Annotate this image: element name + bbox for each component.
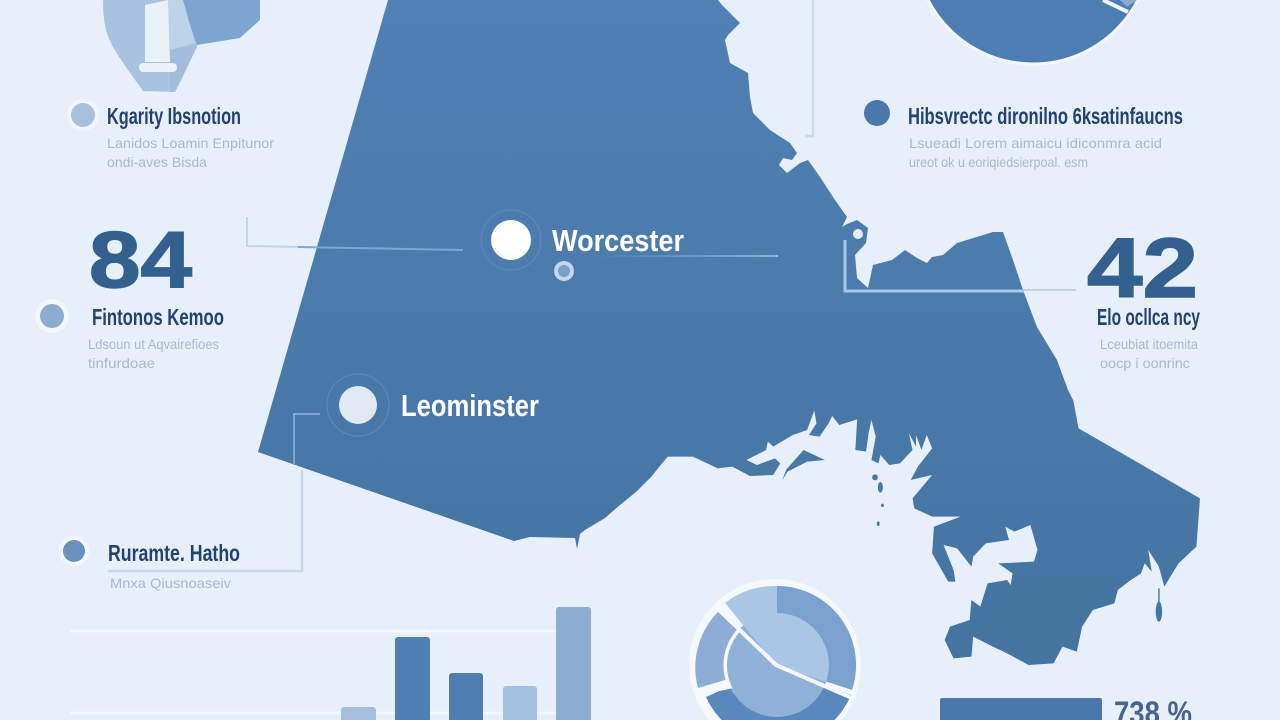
monument illustration (103, 0, 260, 92)
stat: 42: oocp i oonrinc (1100, 355, 1190, 371)
marker: Leominster (327, 374, 539, 436)
callout: top left (67, 99, 274, 170)
small marker (554, 261, 574, 281)
callout: top right: Hibsvrectc dironilno 6ksatinfaucns (908, 103, 1183, 129)
stat: 84: 84 (89, 215, 193, 304)
callout: top left: ondi-aves Bisda (107, 154, 207, 170)
callout: top left: Kgarity Ibsnotion (107, 103, 241, 129)
marker: Leominster: Leominster (401, 388, 539, 423)
bar chart (70, 607, 591, 720)
stat: 84 (35, 215, 224, 371)
progress bar (940, 695, 1192, 720)
donut chart (689, 579, 861, 720)
map silhouette (258, 0, 1200, 665)
stat: 42 (1087, 221, 1200, 371)
stat: 42: Lceubiat itoemita (1100, 336, 1198, 352)
callout: top right: Lsueadi Lorem aimaicu idiconmra acid (909, 135, 1162, 151)
callout: bottom left: Mnxa Qiusnoaseiv (110, 575, 231, 591)
callout: top right: ureot ok u eoriqiedsierpoal. esm (909, 154, 1088, 170)
callout: top right (864, 100, 1183, 170)
stat: 42: 42 (1087, 221, 1198, 315)
marker: Worcester: Worcester (552, 223, 684, 258)
stat: 84: Ldsoun ut Aqvairefioes (88, 336, 219, 352)
callout: top left: Lanidos Loamin Enpitunor (107, 135, 274, 151)
marker: Worcester (481, 210, 684, 270)
connector lines (108, 0, 1076, 571)
callout: bottom left (59, 536, 240, 591)
stat: 84: Fintonos Kemoo (92, 304, 224, 330)
stat: 42: Elo ocllca ncy (1097, 304, 1200, 330)
callout: bottom left: Ruramte. Hatho (108, 540, 240, 566)
stat: 84: tinfurdoae (88, 355, 155, 371)
top pie chart (915, 0, 1151, 64)
